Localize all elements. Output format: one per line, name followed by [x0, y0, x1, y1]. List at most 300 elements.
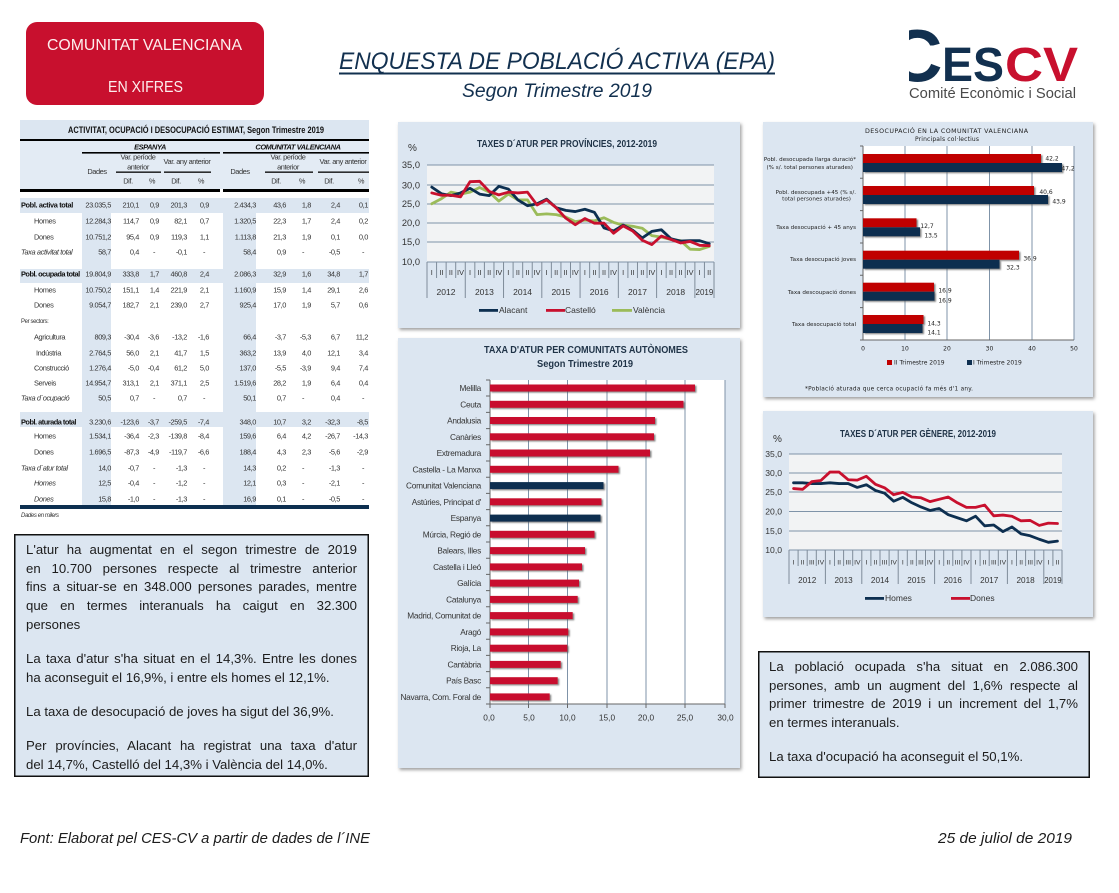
table column headers: % — [299, 176, 306, 186]
table values: 210,1 — [122, 200, 139, 210]
chart title: Principals col·lectius — [915, 136, 979, 143]
value axis labels: 10 — [901, 346, 909, 352]
table values: 0,2 — [277, 464, 286, 472]
value labels: 14,1 — [927, 330, 941, 336]
text block: unemployment summary: que en termes interanuals ha caigut en 32.300 — [26, 598, 357, 613]
table values: 0,9 — [150, 200, 159, 210]
category labels: Comunitat Valenciana — [406, 481, 482, 491]
table values: -3,9 — [300, 364, 311, 372]
value axis labels: 10,0 — [559, 712, 576, 722]
category labels: Taxa descoupació dones — [787, 289, 856, 296]
chart title: Segon Trimestre 2019 — [537, 359, 633, 370]
table values: 15,9 — [273, 286, 286, 294]
table values: 0,3 — [277, 478, 286, 488]
value labels: 43,9 — [1052, 198, 1066, 206]
table values: 313,1 — [122, 378, 139, 388]
category labels: total persones aturades) — [782, 196, 851, 202]
category labels: Madrid, Comunitat de — [407, 611, 482, 621]
table values: 2,4 — [331, 216, 340, 226]
x axis labels: IV — [890, 560, 897, 566]
table column headers: Var. any anterior — [320, 157, 367, 166]
table values: -36,4 — [124, 432, 139, 440]
table values: 22,3 — [273, 216, 286, 226]
category labels: Taxa desocupació joves — [789, 256, 856, 263]
category labels: Andalusia — [447, 416, 482, 426]
table values: 12.284,3 — [85, 216, 111, 226]
table values: 0,9 — [150, 232, 159, 242]
table values: - — [302, 394, 305, 402]
table values: -6,6 — [198, 448, 209, 456]
category labels: Canàries — [450, 432, 481, 442]
table values: -139,8 — [168, 432, 187, 440]
table values: - — [153, 478, 156, 488]
table column headers: % — [358, 176, 365, 186]
table column headers: anterior — [127, 162, 150, 172]
table values: 1.696,5 — [89, 448, 111, 456]
category labels: Castella i Lleó — [433, 562, 482, 572]
table row labels — [21, 200, 80, 519]
x axis labels: 2019 — [696, 288, 714, 297]
x axis labels: 2012 — [437, 287, 456, 297]
table values: 6,4 — [277, 432, 286, 440]
x axis labels: I — [584, 268, 586, 277]
legend: València — [633, 305, 665, 315]
table row labels: Dones — [34, 494, 54, 504]
category labels: Melilla — [459, 383, 482, 393]
value labels: 36,9 — [1023, 256, 1037, 262]
x axis labels: 2018 — [666, 287, 685, 297]
y axis labels: 35,0 — [402, 160, 420, 170]
table values: 159,6 — [240, 432, 256, 440]
table row labels: Homes — [34, 286, 56, 294]
x axis labels: IV — [610, 268, 617, 277]
table row labels: Pobl. ocupada total — [21, 270, 80, 278]
x axis labels: I — [622, 268, 624, 277]
table values: -0,7 — [128, 464, 139, 472]
panel: unemployment rates by gender line chart: % — [773, 434, 782, 445]
table values: 0,4 — [331, 394, 340, 402]
table values: 3.230,6 — [89, 418, 111, 426]
table values: 4,0 — [302, 348, 311, 358]
table values: 0,9 — [277, 248, 286, 256]
table row labels: Dades en milers — [21, 513, 59, 519]
text block: employment summary: La població ocupada s'ha situat en 2.086.300 — [769, 659, 1078, 674]
footer source note: Font: Elaborat pel CES-CV a partir de dades de l´INE — [20, 830, 371, 847]
table values: - — [203, 478, 206, 488]
table values: -1,0 — [128, 494, 139, 504]
text block: unemployment summary: persones — [26, 617, 80, 632]
table values: -2,9 — [357, 448, 368, 456]
value axis labels — [483, 712, 734, 722]
table values: 6,7 — [331, 332, 340, 342]
x axis labels: II — [946, 560, 950, 566]
table row labels: Construcció — [34, 364, 69, 372]
x axis labels: I — [865, 560, 867, 566]
table values: 201,3 — [170, 200, 187, 210]
value labels: 42,2 — [1045, 156, 1059, 162]
category labels: Pobl. desocupada +45 (% s/. — [776, 190, 856, 196]
y axis labels: 15,0 — [765, 526, 782, 536]
table row labels: Taxa activitat total — [21, 248, 73, 256]
table values: -5,5 — [275, 364, 286, 372]
table values: -3,7 — [148, 418, 159, 426]
table values: -8,4 — [198, 432, 209, 440]
table column headers: % — [149, 176, 156, 186]
x axis labels: I — [431, 268, 433, 277]
x axis labels: IV — [963, 560, 970, 566]
panel: unemployment rates by gender line chart — [763, 411, 1093, 617]
table values: 1.160,9 — [234, 286, 256, 294]
text block: unemployment summary — [14, 534, 369, 777]
x axis labels: I — [829, 560, 831, 566]
legend: I Trimestre 2019 — [973, 360, 1022, 366]
table values: 14,3 — [243, 464, 256, 472]
legend: II Trimestre 2019 — [894, 360, 945, 366]
series: Dones — [794, 472, 1057, 525]
series: Homes — [794, 483, 1057, 542]
table values: 0,1 — [331, 232, 340, 242]
table row labels: Homes — [34, 216, 56, 226]
table values: 28,2 — [273, 378, 286, 388]
table values: 3,4 — [359, 348, 368, 358]
x axis labels: I — [975, 560, 977, 566]
legend: Alacant — [499, 305, 528, 315]
table values: - — [362, 464, 365, 472]
value labels: 32,3 — [1006, 264, 1020, 272]
table values: - — [203, 494, 206, 504]
table values: 0,9 — [200, 200, 209, 210]
table values: 182,7 — [122, 300, 139, 310]
x axis labels: II — [602, 268, 606, 277]
table values: - — [153, 494, 156, 504]
table values: 925,4 — [240, 300, 256, 310]
category labels: (% s/. total persones aturades) — [766, 165, 853, 171]
x axis labels: II — [439, 268, 443, 277]
category labels: Catalunya — [446, 594, 482, 604]
table values: 34,8 — [327, 270, 340, 278]
y axis labels: 15,0 — [402, 237, 420, 247]
table values: -5,0 — [128, 364, 139, 372]
header badge: Comunitat Valenciana en xifres: EN XIFRES — [108, 79, 183, 96]
table values: 56,0 — [126, 348, 139, 358]
table values: 1,4 — [302, 286, 311, 294]
y axis labels: 30,0 — [402, 180, 420, 190]
table values: - — [153, 464, 156, 472]
table title: ACTIVITAT, OCUPACIÓ I DESOCUPACIÓ ESTIMAT, Segon Trimestre 2019 — [68, 124, 324, 136]
category labels: Pobl. desocupada llarga duració* — [764, 156, 856, 163]
x axis labels — [431, 268, 714, 297]
chart title: TAXES D´ATUR PER PROVÍNCIES, 2012-2019 — [477, 137, 657, 150]
table row labels: Per sectors: — [21, 319, 49, 325]
category labels: Extremadura — [437, 448, 482, 458]
table row labels: Serveis — [34, 378, 57, 388]
table column headers: Dif. — [271, 176, 281, 186]
table values: 137,0 — [240, 364, 256, 372]
table values: - — [302, 478, 305, 488]
y axis labels: 20,0 — [765, 506, 782, 516]
panel: activity, employment and unemployment table — [20, 120, 369, 519]
y axis labels: 20,0 — [402, 218, 420, 228]
table values: 114,7 — [123, 216, 139, 226]
table values: -2,3 — [148, 432, 159, 440]
table values: - — [362, 494, 365, 504]
table values: -0,5 — [329, 494, 340, 504]
y axis labels: 25,0 — [402, 199, 420, 209]
value axis labels: 50 — [1070, 346, 1078, 352]
value labels: 13,5 — [924, 232, 938, 240]
table values: 1.519,6 — [234, 378, 256, 388]
table values: 12,5 — [98, 478, 111, 488]
x axis labels: II — [707, 268, 711, 277]
panel: unemployment in the Valencian Community, main groups — [763, 122, 1093, 397]
x axis labels: II — [631, 268, 635, 277]
text block: employment summary: en termes interanuals. — [769, 715, 899, 730]
table values: 1.113,8 — [235, 232, 256, 242]
table values: 0,7 — [277, 394, 286, 402]
table column headers: COMUNITAT VALENCIANA — [255, 142, 341, 152]
table values: 7,4 — [359, 364, 368, 372]
value labels: 16,9 — [938, 298, 952, 304]
table values: -14,3 — [353, 432, 368, 440]
legend — [479, 305, 665, 315]
panel: unemployment rates by province line chart: % — [408, 143, 417, 154]
table values: 21,3 — [273, 232, 286, 242]
table values: 3,2 — [302, 418, 311, 426]
x axis labels: I — [546, 268, 548, 277]
header badge: Comunitat Valenciana en xifres — [26, 22, 264, 105]
table values: 1.276,4 — [89, 364, 111, 372]
table values: 14,0 — [98, 464, 111, 472]
table column headers: Dif. — [171, 176, 181, 186]
table values: 460,8 — [170, 270, 187, 278]
table values: 95,4 — [126, 232, 139, 242]
series: Alacant — [432, 186, 709, 244]
chart title: TAXES D´ATUR PER GÈNERE, 2012-2019 — [840, 427, 996, 440]
table values: 1,5 — [200, 348, 209, 358]
table values: - — [153, 394, 156, 402]
table values: 1,4 — [150, 286, 159, 294]
table row labels: Pobl. activa total — [21, 200, 73, 210]
table values: -1,6 — [198, 332, 209, 342]
value axis labels: 40 — [1028, 346, 1036, 352]
x axis labels: II — [801, 560, 805, 566]
value axis labels: 30 — [986, 346, 993, 352]
category labels — [400, 383, 482, 702]
table values: 50,1 — [243, 394, 256, 402]
text block: unemployment summary: ha aconseguit el 16,9%, i entre els homes el 12,1%. — [26, 670, 330, 685]
y axis labels: 10,0 — [765, 545, 782, 555]
table values: - — [302, 494, 305, 504]
table values: 29,1 — [327, 286, 340, 294]
category labels: Espanya — [451, 513, 482, 523]
value axis labels: 0 — [861, 346, 865, 352]
table values: -87,3 — [124, 448, 139, 456]
table values: 239,0 — [170, 300, 187, 310]
table values: 1,1 — [200, 232, 209, 242]
table values: -0,4 — [148, 364, 159, 372]
text block: unemployment summary: La taxa d'atur s'ha situat en el 14,3%. Entre les dones — [26, 651, 357, 666]
x axis labels: II — [564, 268, 568, 277]
value labels: 12,7 — [920, 223, 934, 230]
table values: 66,4 — [243, 332, 256, 342]
table column headers — [87, 142, 367, 186]
text block: unemployment summary: La taxa de desocupació de joves ha sigut del 36,9%. — [26, 704, 334, 719]
table values: 371,1 — [170, 378, 187, 388]
y axis labels — [402, 160, 420, 267]
x axis labels: II — [1056, 560, 1059, 566]
table values: - — [362, 248, 365, 256]
table values: 1,7 — [302, 216, 311, 226]
table values: 82,1 — [174, 216, 187, 226]
value axis labels — [861, 346, 1078, 352]
legend: Dones — [970, 593, 995, 603]
table values: 0,0 — [359, 232, 368, 242]
x axis labels: II — [669, 268, 673, 277]
table values: 9,4 — [331, 364, 340, 372]
value axis labels: 0,0 — [483, 712, 495, 722]
table column headers: % — [198, 176, 205, 186]
x axis labels: 2015 — [907, 576, 926, 585]
legend: Castelló — [565, 305, 596, 315]
x axis labels: IV — [648, 268, 655, 277]
table values: 9.054,7 — [89, 300, 111, 310]
table values: 2,5 — [200, 378, 209, 388]
bars — [490, 384, 695, 700]
x axis labels: IV — [572, 268, 579, 277]
table values: - — [153, 248, 156, 256]
table values: -32,3 — [325, 418, 340, 426]
chart title — [484, 343, 688, 370]
table values: -8,5 — [357, 418, 368, 426]
table values: 363,2 — [240, 348, 256, 358]
table values: 1,9 — [302, 232, 311, 242]
table values: 119,3 — [171, 232, 187, 242]
table column headers: Var. període — [121, 152, 156, 162]
table row labels: Indústria — [36, 348, 62, 358]
table values: 2,6 — [359, 286, 368, 294]
table values: 5,0 — [200, 364, 209, 372]
table column headers: Dades — [230, 167, 250, 176]
x axis labels: III — [1027, 560, 1033, 566]
table values: -5,3 — [300, 332, 311, 342]
category labels: Balears, Illes — [437, 546, 481, 556]
table values: 0,7 — [178, 394, 187, 402]
table values: 2,4 — [200, 270, 209, 278]
x axis labels: 2013 — [475, 287, 494, 297]
header badge: Comunitat Valenciana en xifres: COMUNITAT VALENCIANA — [47, 37, 243, 54]
table values: 58,7 — [98, 248, 111, 256]
table values: 5,7 — [331, 300, 340, 310]
table values: 2.086,3 — [234, 270, 256, 278]
table column headers: Dades — [87, 167, 107, 176]
table values: 2.434,3 — [234, 200, 256, 210]
legend — [865, 593, 995, 603]
x axis labels: II — [478, 268, 482, 277]
x axis labels: 2016 — [944, 576, 962, 585]
logo: CES-CV: ES — [942, 39, 1004, 92]
table values: 16,9 — [243, 494, 256, 504]
table values: -13,2 — [172, 332, 187, 342]
x axis labels: IV — [1036, 560, 1043, 566]
table column headers: Var. any anterior — [164, 157, 211, 166]
x axis labels: IV — [818, 560, 825, 566]
table row labels: Homes — [34, 432, 56, 440]
category labels: Taxa desocupació + 45 anys — [775, 224, 856, 231]
table values: 333,8 — [122, 270, 139, 278]
category labels: País Basc — [446, 676, 481, 686]
value axis labels: 30,0 — [717, 712, 734, 722]
legend — [887, 360, 1022, 366]
y axis labels: 10,0 — [402, 257, 420, 267]
x axis labels: II — [837, 560, 841, 566]
chart title — [865, 126, 1029, 143]
table values: 0,6 — [359, 300, 368, 310]
title — [339, 48, 775, 102]
category labels: Cantàbria — [448, 659, 482, 669]
x axis labels: III — [809, 560, 815, 566]
bars: I Trimestre 2019 — [863, 163, 1062, 333]
legend: Homes — [885, 593, 912, 603]
table values: - — [362, 394, 365, 402]
table values: 0,9 — [150, 216, 159, 226]
text block: unemployment summary: Per províncies, Alacant ha registrat una taxa d'atur — [26, 738, 357, 753]
title: ENQUESTA DE POBLACIÓ ACTIVA (EPA) — [339, 48, 775, 75]
title: Segon Trimestre 2019 — [462, 80, 652, 102]
series: València — [432, 188, 709, 250]
table values: 12,1 — [327, 348, 340, 358]
bars: II Trimestre 2019 — [863, 154, 1041, 324]
table values: 6,4 — [331, 378, 340, 388]
table values — [85, 200, 368, 504]
x axis labels: II — [554, 268, 558, 277]
value axis labels: 15,0 — [599, 712, 615, 722]
table values: 0,7 — [200, 216, 209, 226]
text block: unemployment summary: L'atur ha augmentat en el segon trimestre de 2019 — [26, 542, 357, 557]
table column headers: anterior — [277, 162, 300, 172]
table values: 10,7 — [273, 418, 286, 426]
table values: 2,1 — [150, 348, 159, 358]
table row labels: Dones — [34, 448, 54, 456]
table column headers: Var. període — [271, 152, 306, 162]
table values: 1.534,1 — [89, 432, 111, 440]
x axis labels: 2019 — [1044, 576, 1062, 585]
table values: - — [302, 464, 305, 472]
table row labels: Taxa d´atur total — [21, 464, 68, 472]
value labels: 47,2 — [1061, 166, 1075, 172]
x axis labels: II — [487, 268, 491, 277]
table values: -3,7 — [275, 332, 286, 342]
x axis labels: IV — [687, 268, 694, 277]
logo: CES-CV: CV — [1005, 39, 1078, 92]
x axis labels: II — [983, 560, 987, 566]
category labels — [764, 156, 856, 328]
table values: -259,5 — [168, 418, 187, 426]
x axis labels: III — [955, 560, 960, 566]
text block: employment summary: persones, amb un augment del 1,6% respecte al — [769, 678, 1078, 693]
category labels: Taxa desocupació total — [791, 321, 856, 328]
category labels: Astúries, Principat d' — [412, 497, 482, 507]
value labels — [920, 156, 1075, 336]
table values: -1,3 — [329, 464, 340, 472]
x axis labels: 2013 — [834, 576, 853, 585]
table values: 348,0 — [240, 418, 256, 426]
x axis labels: I — [793, 560, 795, 566]
table values: 1,9 — [302, 378, 311, 388]
text block: unemployment summary: del 14,7%, Castelló del 14,3% i València del 14,0%. — [26, 757, 328, 772]
panel: unemployment rate by autonomous community bar chart — [398, 338, 740, 768]
value labels: 16,9 — [938, 288, 952, 294]
table values: 23.035,5 — [85, 200, 111, 210]
